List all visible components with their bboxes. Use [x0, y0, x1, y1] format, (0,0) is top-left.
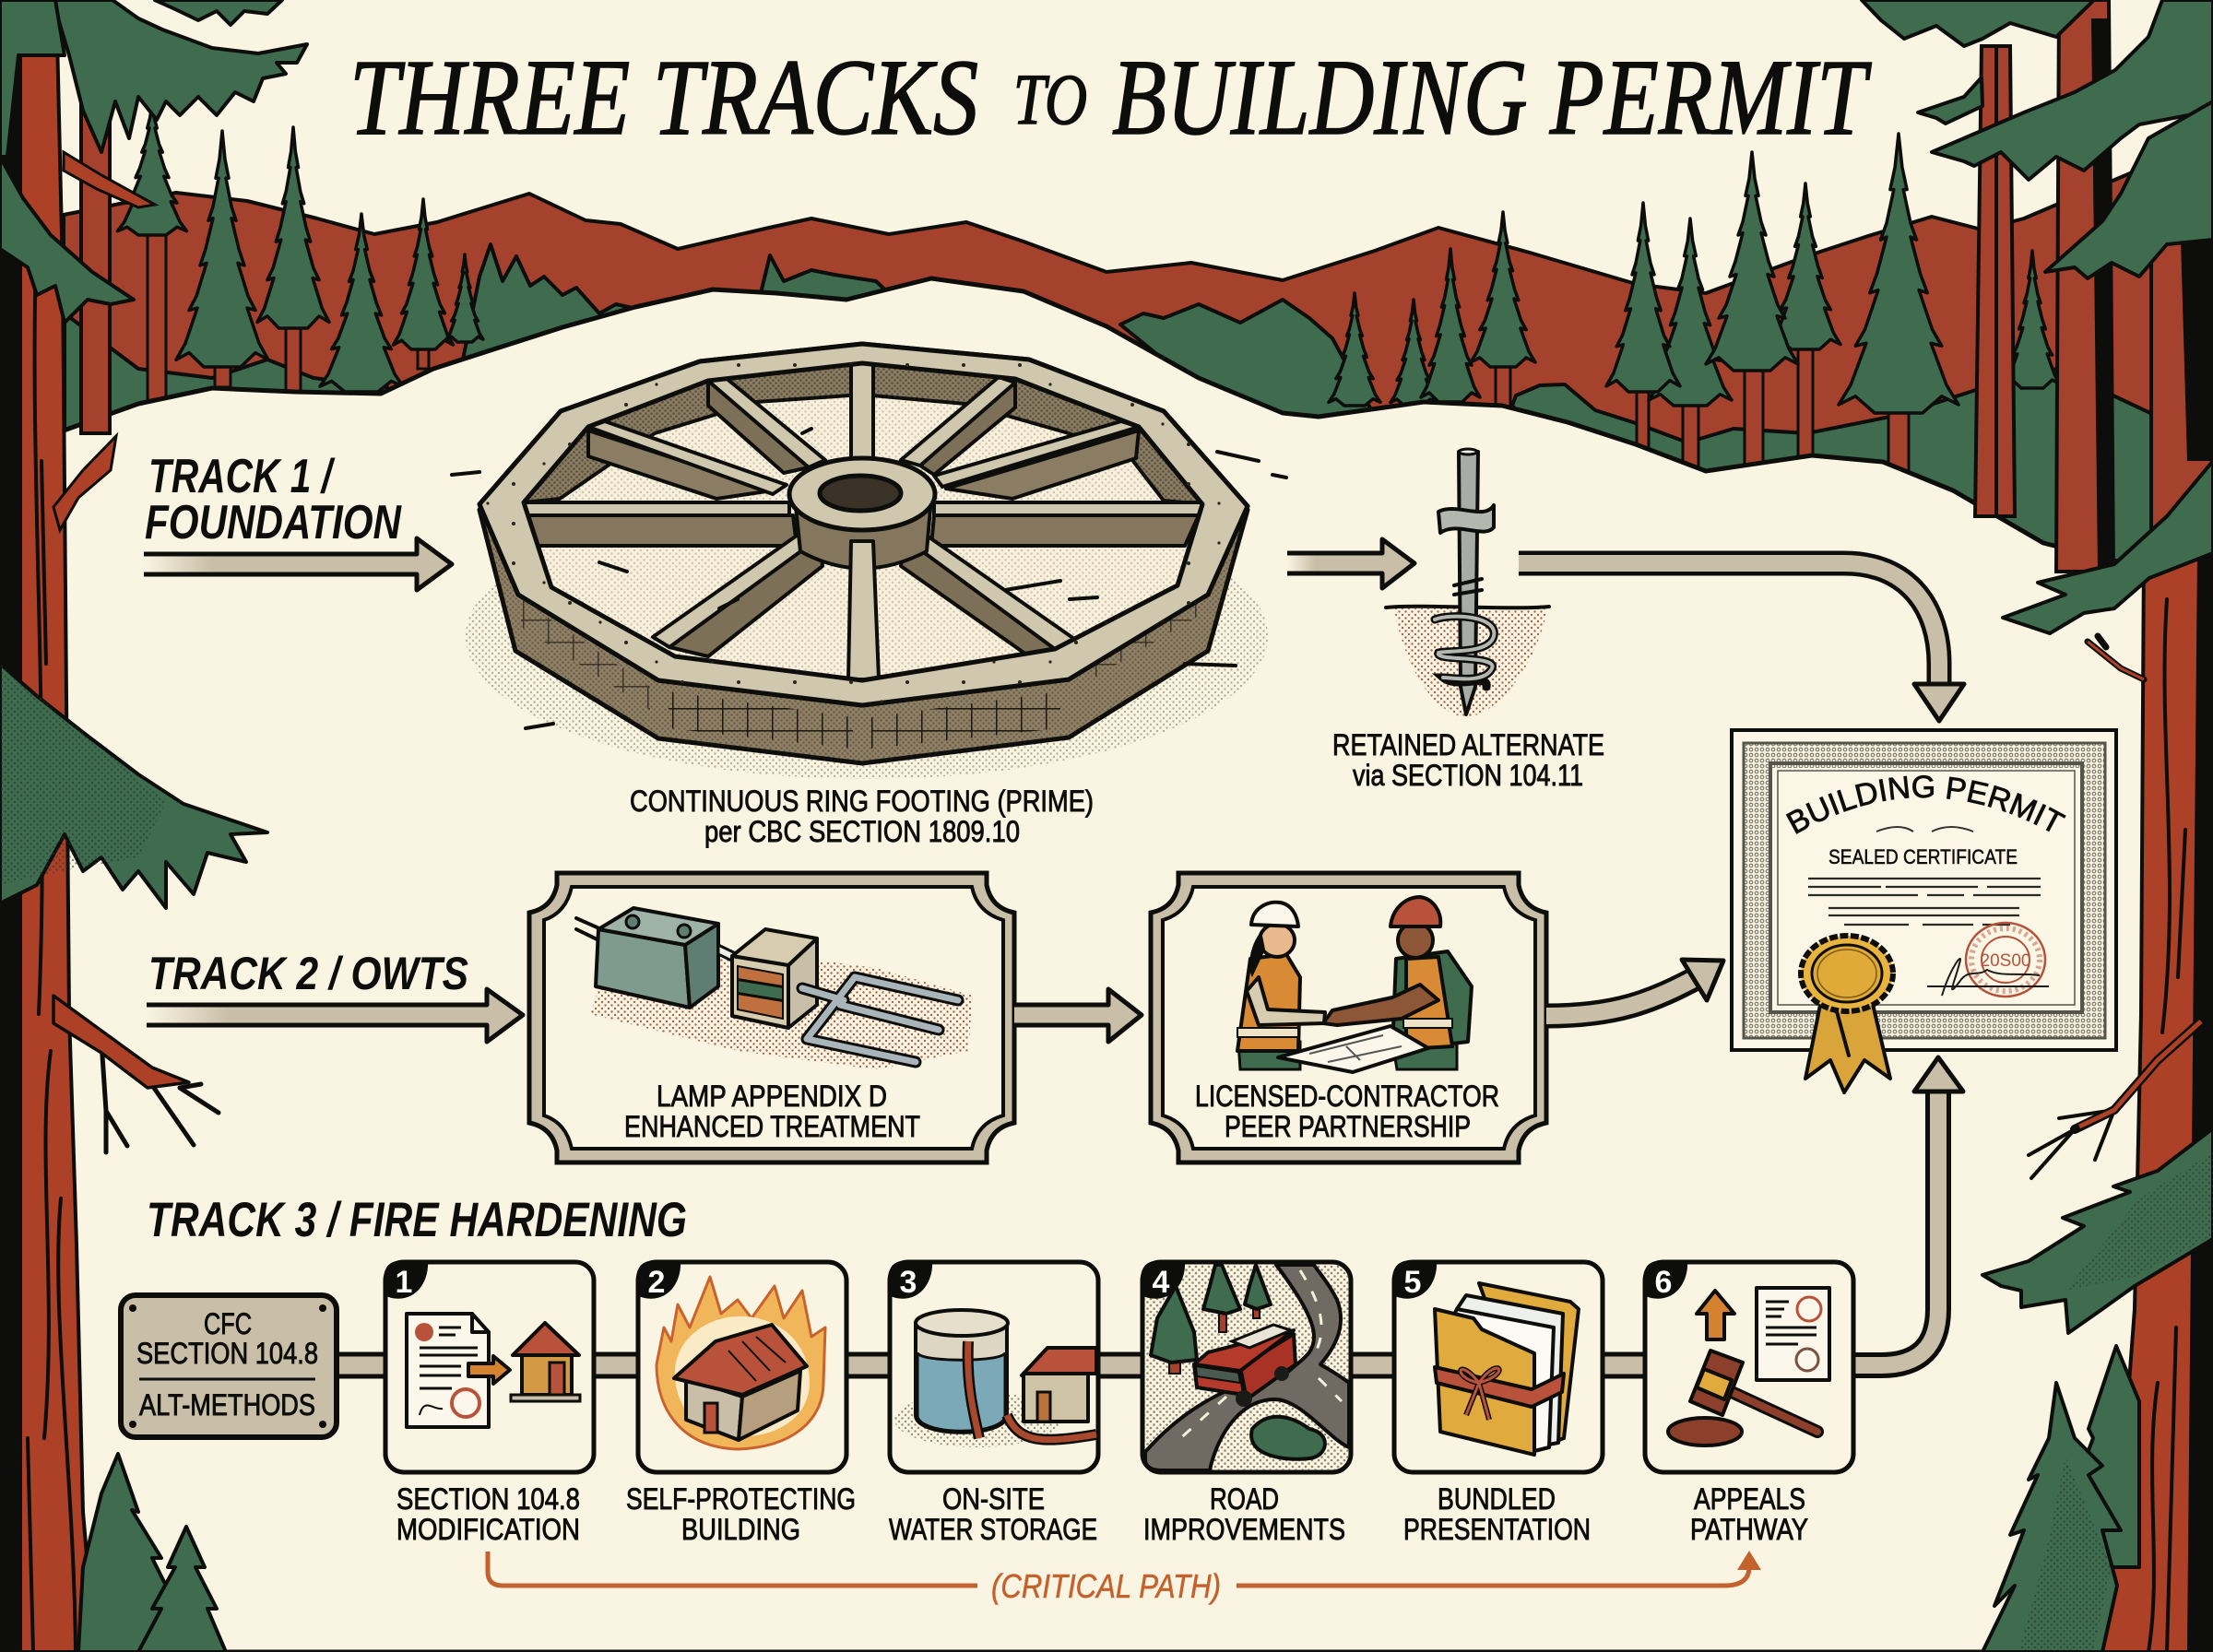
- panel caption: [1195, 1080, 1499, 1143]
- signature: [1927, 959, 2049, 996]
- illustration: helical screw pile: [1386, 449, 1549, 717]
- background fir trees: right group: [1329, 134, 2060, 484]
- arrow: footing to helical pile: [1287, 539, 1414, 588]
- badge 6: [1643, 1260, 1687, 1300]
- track 1 heading: [145, 450, 402, 549]
- panel caption: ENHANCED TREATMENT: [624, 1110, 920, 1143]
- panel: licensed-contractor peer partnership: [1151, 873, 1546, 1162]
- icon: document to house: [407, 1314, 580, 1427]
- title: BUILDING PERMIT: [1112, 37, 1872, 158]
- icon: gavel, up arrow and document: [1668, 1288, 1829, 1446]
- certificate heading: BUILDING PERMIT: [1785, 774, 2066, 834]
- caption: ring footing: [630, 785, 1094, 848]
- label step 2: [626, 1482, 856, 1546]
- label step 5: BUNDLED: [1438, 1482, 1556, 1516]
- caption: retained alternate: via SECTION 104.11: [1353, 759, 1583, 792]
- label step 3: WATER STORAGE: [889, 1513, 1097, 1546]
- title: [349, 37, 1872, 158]
- arrow: track 2 to treatment panel: [147, 989, 523, 1042]
- badge 3: [888, 1260, 932, 1300]
- badge 4: [1141, 1260, 1185, 1300]
- label step 4: [1143, 1482, 1345, 1546]
- background fir trees: left group: [118, 101, 483, 406]
- red stamp: [1966, 923, 2045, 997]
- icon: house ringed by flames: [657, 1277, 825, 1449]
- label step 3: [889, 1482, 1097, 1546]
- connector fill: [332, 1357, 1651, 1374]
- arrow: track 1 to permit: [1519, 563, 1964, 721]
- panel caption: PEER PARTNERSHIP: [1225, 1110, 1471, 1143]
- right redwood boughs: [1862, 0, 2213, 1333]
- label step 6: APPEALS: [1694, 1482, 1805, 1516]
- certificate subheading: SEALED CERTIFICATE: [1828, 845, 2018, 868]
- plate: CFC section 104.8 alt-methods: CFC: [204, 1307, 252, 1340]
- badge 1: [384, 1260, 428, 1300]
- badge 6: 6: [1655, 1265, 1672, 1300]
- step 2: self-protecting building: [636, 1260, 846, 1472]
- step 4: road improvements: [1141, 1260, 1351, 1472]
- title: THREE TRACKS: [349, 37, 978, 158]
- label step 2: BUILDING: [681, 1513, 800, 1546]
- plate: CFC section 104.8 alt-methods: ALT-METHODS: [139, 1388, 315, 1422]
- label step 1: SECTION 104.8: [396, 1482, 580, 1516]
- arrow: track 1 to ring footing: [144, 538, 452, 590]
- left redwood trunks: [0, 0, 219, 1652]
- label step 4: ROAD: [1210, 1482, 1279, 1516]
- illustration: septic tank and leach field: [576, 908, 973, 1069]
- snowy clearing: [64, 278, 2158, 1652]
- badge 4: 4: [1153, 1265, 1170, 1300]
- track 3 heading: TRACK 3 / FIRE HARDENING: [147, 1193, 687, 1247]
- icon: fire truck on road: [1145, 1265, 1349, 1470]
- sealed building permit certificate: [1730, 728, 2118, 1095]
- label step 2: SELF-PROTECTING: [626, 1482, 856, 1516]
- connector: track 3 chain: [332, 1354, 1651, 1376]
- critical path bracket: [488, 1551, 1761, 1605]
- red stamp: 20S00: [1981, 951, 2030, 971]
- label step 1: [396, 1482, 580, 1546]
- caption: ring footing: per CBC SECTION 1809.10: [704, 815, 1020, 848]
- caption: retained alternate: [1332, 728, 1604, 792]
- icon: folder tied with ribbon: [1435, 1283, 1579, 1455]
- left redwood boughs: [0, 0, 307, 908]
- label step 3: ON-SITE: [942, 1482, 1045, 1516]
- gold seal with ribbon: [1801, 936, 1893, 1092]
- step 6: appeals pathway: [1643, 1260, 1853, 1472]
- badge 2: [636, 1260, 680, 1300]
- arrow: track 2 to permit: [1546, 960, 1723, 1016]
- label step 1: MODIFICATION: [396, 1513, 580, 1546]
- illustration: two contractors shaking hands: [1237, 897, 1472, 1072]
- badge 5: [1392, 1260, 1437, 1300]
- panel caption: LAMP APPENDIX D: [657, 1080, 887, 1113]
- track 1 heading: TRACK 1 /: [148, 450, 336, 503]
- panel caption: LICENSED-CONTRACTOR: [1195, 1080, 1499, 1113]
- label step 6: [1690, 1482, 1808, 1546]
- panel: LAMP Appendix D enhanced treatment: [529, 873, 1014, 1162]
- arrow: treatment to partnership: [1014, 989, 1142, 1042]
- track 1 heading: FOUNDATION: [145, 496, 402, 549]
- track 2 heading: TRACK 2 / OWTS: [148, 948, 468, 999]
- caption: ring footing: CONTINUOUS RING FOOTING (PRIME): [630, 785, 1094, 818]
- illustration: continuous ring footing: [452, 344, 1286, 779]
- badge 1: 1: [396, 1265, 412, 1300]
- step 5: bundled presentation: [1392, 1260, 1603, 1472]
- plate: CFC section 104.8 alt-methods: [121, 1295, 337, 1437]
- caption: retained alternate: RETAINED ALTERNATE: [1332, 728, 1604, 761]
- title: TO: [1013, 59, 1087, 139]
- certificate body lines: [1808, 879, 2041, 925]
- label step 4: IMPROVEMENTS: [1143, 1513, 1345, 1546]
- icon: water tank with hose to house: [894, 1310, 1096, 1447]
- bottom-right small firs: [1982, 1346, 2139, 1652]
- badge 3: 3: [900, 1265, 917, 1300]
- landscape: green foothills: [65, 244, 2213, 590]
- label step 6: PATHWAY: [1690, 1513, 1808, 1546]
- arrow: track 3 to permit: [1854, 1057, 1963, 1365]
- panel caption: [624, 1080, 920, 1143]
- badge 5: 5: [1404, 1265, 1421, 1300]
- critical path bracket: (CRITICAL PATH): [991, 1567, 1221, 1605]
- label step 5: PRESENTATION: [1403, 1513, 1591, 1546]
- certificate ornament: [1876, 827, 1973, 832]
- plate: CFC section 104.8 alt-methods: SECTION 104.8: [136, 1337, 318, 1370]
- step 3: on-site water storage: [888, 1260, 1098, 1472]
- step 1: section 104.8 modification: [384, 1260, 594, 1472]
- badge 2: 2: [648, 1265, 665, 1300]
- label step 5: [1403, 1482, 1591, 1546]
- bottom-left small firs: [78, 1454, 226, 1652]
- landscape: red mountain range: [64, 138, 2213, 572]
- right redwood trunks: [1975, 0, 2213, 1652]
